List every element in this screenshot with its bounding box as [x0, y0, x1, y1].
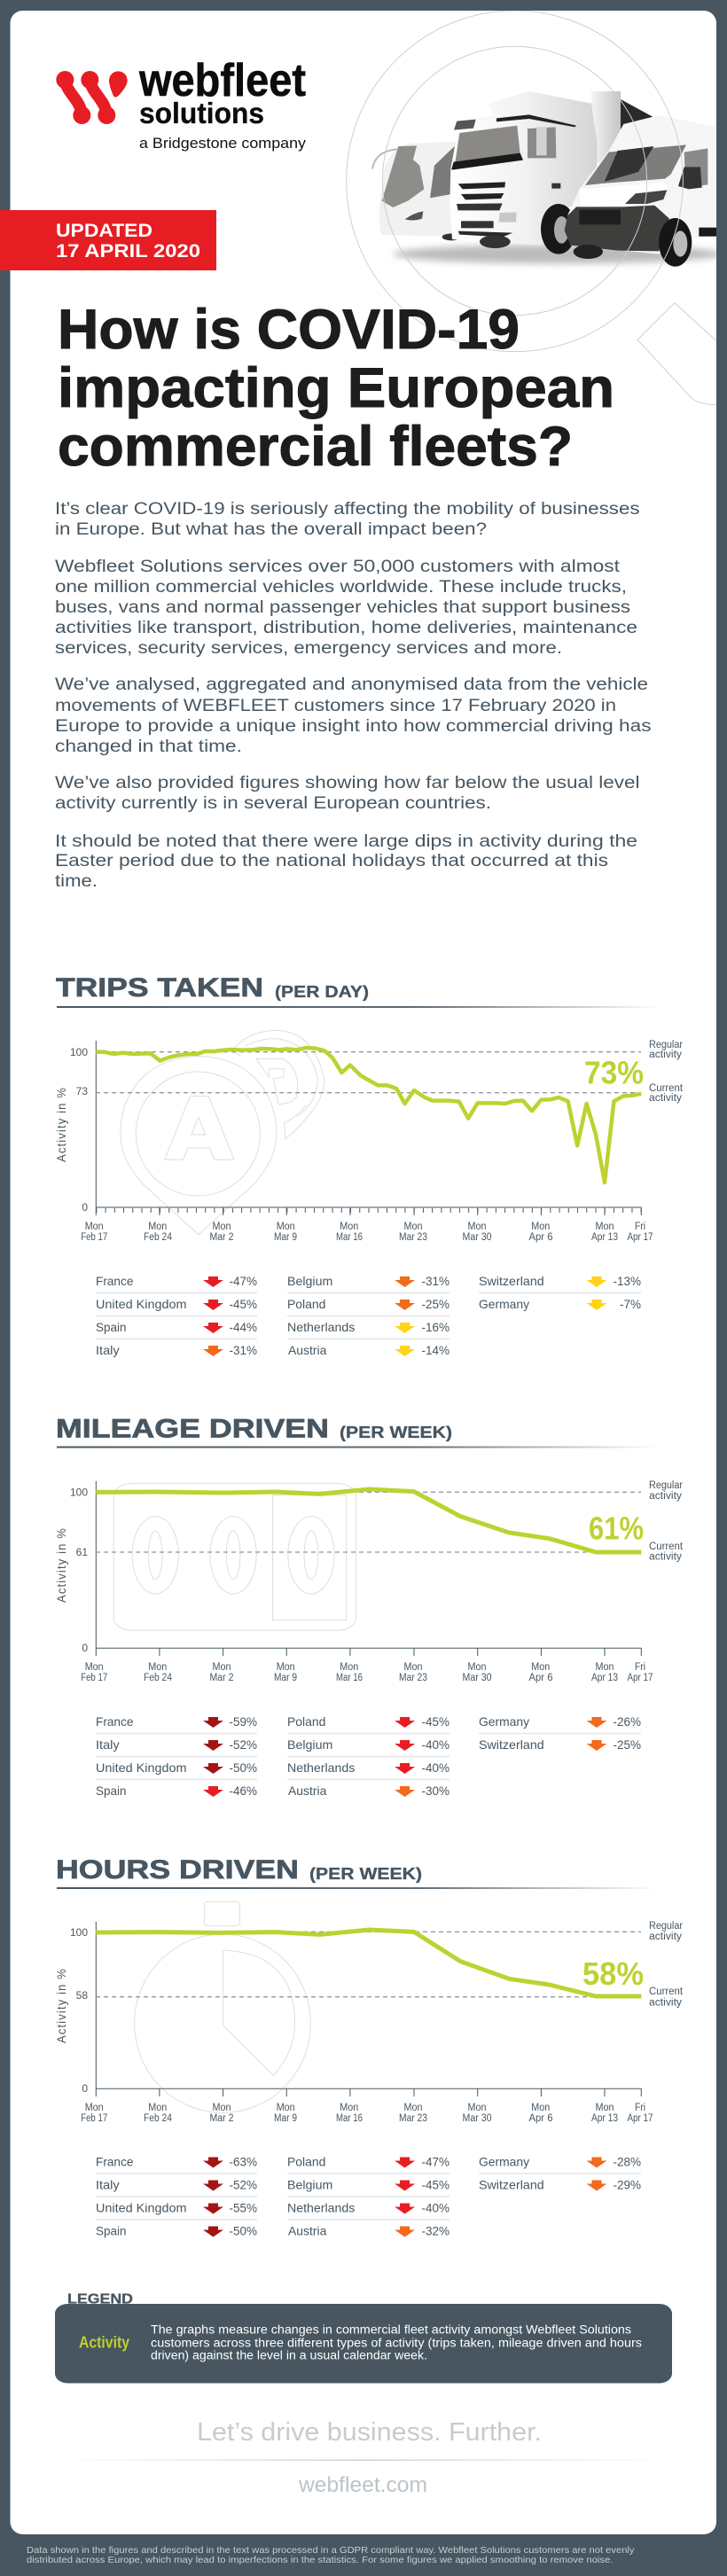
intro text: one million commercial vehicles worldwide. These include trucks,	[55, 578, 627, 597]
line labels: activity	[649, 1093, 682, 1104]
x axis labels: Mon	[531, 2103, 550, 2113]
x axis labels: Mon	[531, 1662, 550, 1673]
website: webfleet.com	[298, 2473, 427, 2497]
line labels: Regular	[649, 1480, 683, 1491]
heading: trips taken	[56, 973, 659, 1008]
x axis labels: Mar 9	[274, 1673, 297, 1683]
y axis labels: 0	[82, 1201, 88, 1214]
line labels: activity	[649, 1050, 682, 1060]
value: 73%: 73%	[584, 1055, 644, 1090]
table: hours by country	[96, 2154, 641, 2237]
row: Italy: -52%	[229, 1738, 257, 1752]
intro text: activities like transport, distribution, home deliveries, maintenance	[55, 619, 637, 637]
row: Italy: -31%	[229, 1344, 257, 1357]
x axis labels: Feb 17	[81, 2113, 107, 2124]
x axis labels: Mon	[404, 1662, 422, 1673]
watermark: map pins A and B	[121, 1030, 324, 1235]
logo tagline: a Bridgestone company	[139, 135, 307, 152]
row: Belgium: Belgium	[287, 2177, 332, 2191]
footnote	[27, 2545, 635, 2565]
x axis labels: Apr 6	[528, 1232, 553, 1243]
row: United Kingdom	[96, 2200, 257, 2214]
row: Austria: Austria	[288, 2223, 327, 2237]
row: United Kingdom: -50%	[229, 1761, 257, 1775]
y axis labels	[54, 1486, 88, 1654]
x axis labels: Feb 17	[81, 1232, 107, 1243]
line labels	[649, 1921, 684, 2009]
row: Germany	[479, 2154, 641, 2168]
x axis labels: Mon	[213, 1222, 231, 1232]
row: Belgium	[287, 2177, 449, 2191]
legend description: The graphs measure changes in commercial fleet activity amongst Webfleet Solutions	[151, 2322, 631, 2337]
data line: mileage	[96, 1489, 641, 1552]
line labels: Current	[649, 1987, 684, 1997]
row: Spain: -46%	[229, 1784, 257, 1798]
x axis labels: Feb 24	[144, 2113, 173, 2124]
row: Austria	[288, 2223, 449, 2237]
intro text: It should be noted that there were large dips in activity during the	[55, 832, 637, 851]
row: Austria	[288, 1343, 449, 1357]
x axis labels: Mon	[148, 1662, 167, 1673]
x axis labels: Mon	[85, 2103, 104, 2113]
row: United Kingdom: -55%	[229, 2202, 257, 2214]
row: Germany: Germany	[479, 1297, 529, 1311]
watermark: odometer	[113, 1483, 356, 1630]
row: Austria: -30%	[421, 1784, 449, 1798]
row: Italy	[96, 1343, 257, 1357]
banner: updated date	[0, 210, 216, 270]
chart: hours line chart	[54, 1901, 684, 2124]
x axis labels: Mar 23	[399, 1673, 427, 1683]
row: France: France	[96, 1714, 134, 1729]
legend key: Activity	[79, 2333, 129, 2351]
legend	[55, 2292, 672, 2383]
x axis labels: Mon	[404, 2103, 422, 2113]
x axis labels: Apr 17	[628, 1673, 653, 1683]
x axis labels: Mar 23	[399, 1232, 427, 1243]
row: Spain	[96, 1784, 257, 1798]
row: France	[96, 2154, 257, 2168]
x axis labels: Mon	[468, 1662, 486, 1673]
x axis labels: Mon	[404, 1222, 422, 1232]
row: France: -63%	[229, 2156, 257, 2168]
row: Italy: -52%	[229, 2179, 257, 2191]
legend box	[55, 2304, 672, 2383]
row: Poland: Poland	[287, 2154, 325, 2168]
x axis labels: Apr 13	[591, 2113, 618, 2124]
row: Germany	[479, 1714, 641, 1729]
y axis labels	[54, 1046, 88, 1214]
x axis labels: Mon	[468, 2103, 486, 2113]
data line: trips	[96, 1048, 641, 1183]
x axis labels: Mon	[340, 1222, 358, 1232]
tagline: Let’s drive business. Further.	[197, 2418, 542, 2447]
row: Poland	[287, 2154, 449, 2168]
x axis labels	[81, 1662, 653, 1683]
logo wordmark: webfleet	[138, 55, 306, 106]
row: Switzerland	[479, 2177, 641, 2191]
x axis labels: Mar 16	[336, 1232, 363, 1243]
row: Netherlands	[287, 1760, 449, 1775]
intro text: time.	[55, 872, 98, 891]
row: France: -47%	[229, 1275, 257, 1288]
x axis labels: Feb 17	[81, 1673, 107, 1683]
row: Netherlands: -16%	[421, 1321, 449, 1334]
x axis labels: Mon	[277, 1222, 295, 1232]
value: 61%: 61%	[589, 1510, 644, 1546]
x axis labels: Mar 30	[463, 1673, 491, 1683]
banner: updated date: 17 APRIL 2020	[56, 241, 200, 262]
intro text: activity currently is in several European countries.	[55, 794, 491, 813]
truck cargo box	[591, 91, 621, 162]
x axis labels: Mon	[85, 1662, 104, 1673]
row: Belgium: Belgium	[287, 1274, 332, 1288]
row: France	[96, 1714, 257, 1729]
x axis labels	[81, 2103, 653, 2124]
x axis labels: Mar 2	[209, 1673, 234, 1683]
x axis labels: Apr 17	[628, 2113, 653, 2124]
row: Spain: -44%	[229, 1321, 257, 1334]
footnote: Data shown in the figures and described in the text was processed in a GDPR compliant way. Webfleet Solutions customers are not evenly	[27, 2545, 635, 2556]
row: Switzerland: -25%	[613, 1738, 641, 1752]
heading: hours driven: (PER WEEK)	[309, 1865, 422, 1883]
row: Poland	[287, 1714, 449, 1729]
x axis labels: Mar 9	[274, 2113, 297, 2124]
van	[565, 115, 718, 267]
row: Austria: -32%	[421, 2225, 449, 2237]
row: Poland: Poland	[287, 1297, 325, 1311]
heading: mileage driven	[56, 1415, 659, 1448]
row: Germany: -7%	[620, 1298, 641, 1311]
x axis labels: Apr 6	[528, 2113, 553, 2124]
row: Italy: Italy	[96, 2177, 120, 2191]
x axis labels: Mon	[596, 2103, 614, 2113]
row: Italy: Italy	[96, 1737, 120, 1752]
row: Netherlands: -40%	[421, 2202, 449, 2214]
bus	[372, 142, 461, 240]
x axis labels: Mon	[277, 2103, 295, 2113]
x axis labels: Mar 30	[463, 2113, 491, 2124]
line labels: activity	[649, 1932, 682, 1942]
row: Netherlands	[287, 1320, 449, 1334]
ground shadow	[393, 245, 724, 263]
row: Spain: -50%	[229, 2225, 257, 2237]
x axis labels: Fri	[635, 1222, 645, 1232]
heading: mileage driven: MILEAGE DRIVEN	[56, 1415, 329, 1443]
intro text: buses, vans and normal passenger vehicles that support business	[55, 598, 630, 617]
row: Spain: Spain	[96, 1784, 126, 1798]
footnote: distributed across Europe, which may lead to imperfections in the statistics. For some figures we applied smoothing to remove noise.	[27, 2555, 614, 2565]
panel: mileage driven	[54, 1415, 684, 1798]
y axis labels: 100	[70, 1046, 88, 1058]
row: Netherlands: Netherlands	[287, 2200, 355, 2214]
banner: updated date: UPDATED	[56, 221, 152, 241]
row: Switzerland: Switzerland	[479, 1737, 544, 1752]
panel: trips taken	[54, 973, 684, 1357]
row: Germany	[479, 1297, 641, 1311]
row: Netherlands	[287, 2200, 449, 2214]
x axis labels: Mon	[468, 1222, 486, 1232]
line labels: activity	[649, 1491, 682, 1502]
x axis labels: Mar 30	[463, 1232, 491, 1243]
x axis labels	[81, 1222, 653, 1243]
intro text: Europe to provide a unique insight into how commercial driving has	[55, 717, 652, 736]
x axis labels: Mar 9	[274, 1232, 297, 1243]
intro text: in Europe. But what has the overall impact been?	[55, 520, 487, 539]
x axis labels: Mar 2	[209, 2113, 234, 2124]
x axis labels: Feb 24	[144, 1232, 173, 1243]
row: Poland	[287, 1297, 449, 1311]
line labels: activity	[649, 1998, 682, 2009]
intro text: services, security services, emergency services and more.	[55, 639, 562, 658]
row: Switzerland	[479, 1274, 641, 1288]
x axis labels: Apr 13	[591, 1232, 618, 1243]
heading: mileage driven: (PER WEEK)	[340, 1424, 452, 1441]
intro text: changed in that time.	[55, 738, 242, 756]
row: Netherlands: Netherlands	[287, 1760, 355, 1775]
x axis labels: Mon	[213, 1662, 231, 1673]
intro text: movements of WEBFLEET customers since 17 February 2020 in	[55, 697, 616, 715]
row: United Kingdom	[96, 1297, 257, 1311]
x axis labels: Mon	[148, 2103, 167, 2113]
x axis labels: Mon	[596, 1222, 614, 1232]
y axis labels: 61	[76, 1546, 88, 1558]
row: United Kingdom: United Kingdom	[96, 2200, 186, 2214]
row: Belgium	[287, 1737, 449, 1752]
row: Belgium: -31%	[421, 1275, 449, 1288]
row: Austria: Austria	[288, 1343, 327, 1357]
y axis labels: 100	[70, 1486, 88, 1498]
row: France: France	[96, 1274, 134, 1288]
row: Switzerland	[479, 1737, 641, 1752]
heading: trips taken: TRIPS TAKEN	[56, 973, 263, 1003]
x axis labels: Mar 2	[209, 1232, 234, 1243]
x axis labels: Fri	[635, 1662, 645, 1673]
row: Poland: -45%	[421, 1715, 449, 1729]
line labels: Current	[649, 1542, 684, 1552]
row: Poland: -25%	[421, 1298, 449, 1311]
x axis labels: Mar 16	[336, 2113, 363, 2124]
x axis labels: Mon	[85, 1222, 104, 1232]
table: trips by country	[96, 1274, 641, 1357]
intro text: Easter period due to the national holidays that occurred at this	[55, 852, 608, 870]
line labels: Regular	[649, 1040, 683, 1050]
truck	[449, 91, 597, 254]
row: Germany: -28%	[613, 2156, 641, 2168]
intro text: It’s clear COVID-19 is seriously affecting the mobility of businesses	[55, 500, 640, 519]
x axis labels: Mon	[148, 1222, 167, 1232]
row: Spain: Spain	[96, 1320, 126, 1334]
row: Netherlands: Netherlands	[287, 1320, 355, 1334]
row: France: -59%	[229, 1715, 257, 1729]
y axis labels: Activity in %	[54, 1968, 68, 2043]
image: commercial vehicles	[372, 91, 724, 267]
row: Switzerland: -13%	[613, 1275, 641, 1288]
y axis labels: 58	[76, 1989, 88, 2002]
y axis labels: 0	[82, 2082, 88, 2095]
value: 58%: 58%	[582, 1955, 644, 1992]
row: Poland: Poland	[287, 1714, 325, 1729]
chart: trips taken line chart	[54, 1030, 684, 1243]
legend description: customers across three different types of activity (trips taken, mileage driven and hours	[151, 2337, 642, 2349]
row: Belgium: -40%	[421, 1738, 449, 1752]
line labels: Current	[649, 1083, 684, 1094]
row: France	[96, 1274, 257, 1288]
x axis labels: Mon	[531, 1222, 550, 1232]
y axis labels	[54, 1926, 88, 2095]
table: mileage by country	[96, 1714, 641, 1798]
row: Austria: -14%	[421, 1344, 449, 1357]
line labels	[649, 1480, 684, 1562]
panel: hours driven	[54, 1855, 684, 2237]
heading: trips taken: (PER DAY)	[275, 983, 369, 1001]
row: Poland: -47%	[421, 2156, 449, 2168]
row: Italy: Italy	[96, 1343, 120, 1357]
y axis labels: Activity in %	[54, 1527, 68, 1603]
intro text: We’ve also provided figures showing how far below the usual level	[55, 774, 640, 792]
x axis labels: Apr 17	[628, 1232, 653, 1243]
y axis labels: 100	[70, 1926, 88, 1939]
x axis labels: Fri	[635, 2103, 645, 2113]
y axis labels: Activity in %	[54, 1087, 68, 1162]
row: United Kingdom: -45%	[229, 1298, 257, 1311]
row: Spain	[96, 1320, 257, 1334]
row: Spain	[96, 2223, 257, 2237]
title	[58, 299, 614, 478]
heading: hours driven: HOURS DRIVEN	[56, 1855, 299, 1885]
row: Switzerland: Switzerland	[479, 1274, 544, 1288]
row: Switzerland: -29%	[613, 2179, 641, 2191]
x axis labels: Apr 6	[528, 1673, 553, 1683]
row: Austria	[288, 1784, 449, 1798]
row: United Kingdom: United Kingdom	[96, 1760, 186, 1775]
row: Germany: -26%	[613, 1715, 641, 1729]
x axis labels: Mon	[596, 1662, 614, 1673]
row: United Kingdom	[96, 1760, 257, 1775]
x axis labels: Mon	[213, 2103, 231, 2113]
row: United Kingdom: United Kingdom	[96, 1297, 186, 1311]
heading: hours driven	[56, 1855, 659, 1889]
y axis labels: 73	[76, 1085, 88, 1097]
row: Switzerland: Switzerland	[479, 2177, 544, 2191]
title: impacting European	[58, 357, 614, 419]
row: Belgium: Belgium	[287, 1737, 332, 1752]
row: Spain: Spain	[96, 2223, 126, 2237]
row: Germany: Germany	[479, 2154, 529, 2168]
x axis labels: Mar 16	[336, 1673, 363, 1683]
watermark: stopwatch	[135, 1901, 310, 2112]
title: commercial fleets?	[58, 416, 573, 478]
legend description	[151, 2322, 642, 2361]
background watermark: wheel circles	[347, 11, 718, 405]
line labels: activity	[649, 1551, 682, 1562]
logo wordmark line 2: solutions	[139, 97, 264, 129]
chart: mileage line chart	[54, 1480, 684, 1683]
legend description: driven) against the level in a usual calendar week.	[151, 2349, 427, 2361]
intro text	[55, 500, 652, 891]
x axis labels: Feb 24	[144, 1673, 173, 1683]
x axis labels: Mon	[277, 1662, 295, 1673]
row: Italy	[96, 2177, 257, 2191]
row: Italy	[96, 1737, 257, 1752]
row: Belgium: -45%	[421, 2179, 449, 2191]
line labels: Regular	[649, 1921, 683, 1932]
logo: Webfleet Solutions	[56, 55, 307, 152]
intro text: We’ve analysed, aggregated and anonymised data from the vehicle	[55, 675, 648, 694]
row: Netherlands: -40%	[421, 1761, 449, 1775]
intro text: Webfleet Solutions services over 50,000 customers with almost	[55, 558, 621, 576]
x axis labels: Mon	[340, 1662, 358, 1673]
legend heading: LEGEND	[67, 2292, 133, 2307]
data line: hours	[96, 1930, 641, 1996]
x axis labels: Mon	[340, 2103, 358, 2113]
title: How is COVID-19	[58, 299, 520, 361]
x axis labels: Apr 13	[591, 1673, 618, 1683]
row: Germany: Germany	[479, 1714, 529, 1729]
row: France: France	[96, 2154, 134, 2168]
x axis labels: Mar 23	[399, 2113, 427, 2124]
logo mark	[56, 71, 128, 124]
line labels	[649, 1040, 684, 1104]
y axis labels: 0	[82, 1642, 88, 1654]
row: Austria: Austria	[288, 1784, 327, 1798]
row: Belgium	[287, 1274, 449, 1288]
